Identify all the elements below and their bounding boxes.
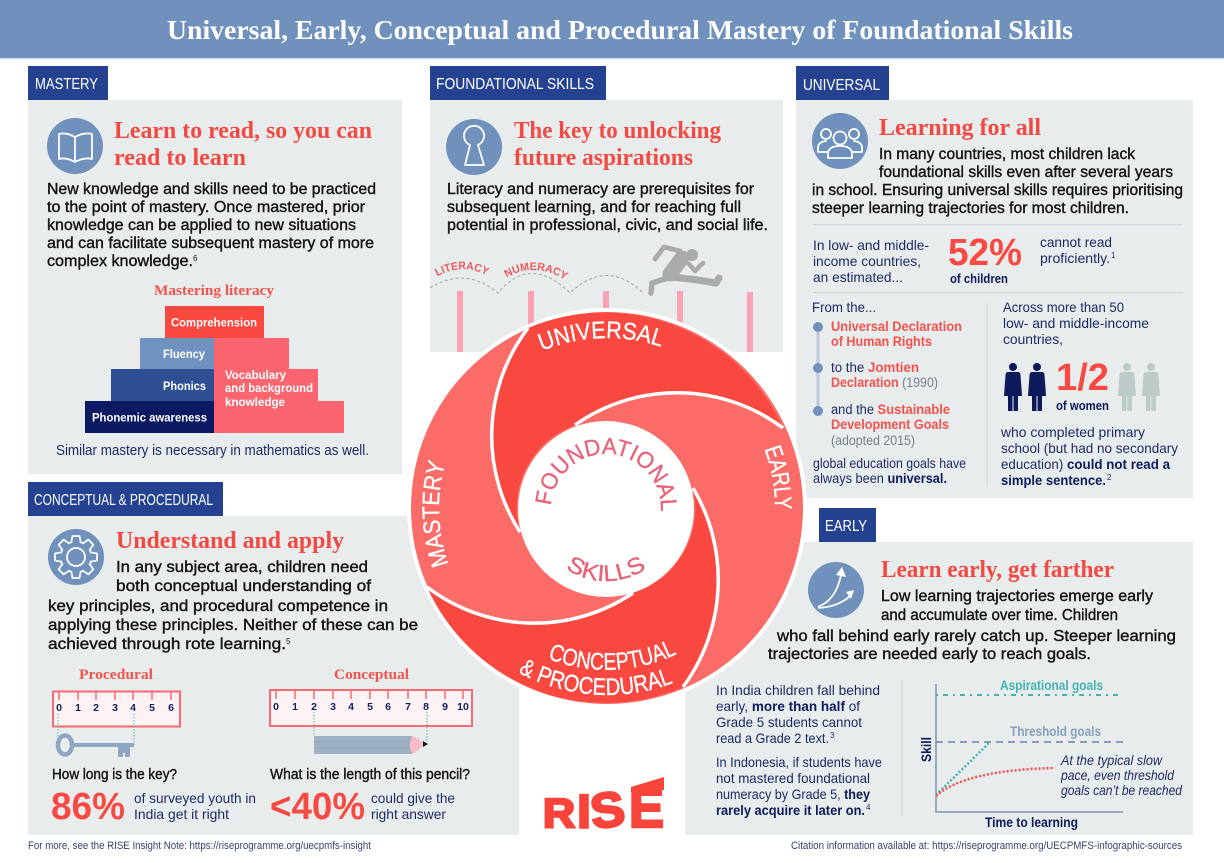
conceptual: pencil on ruler: Conceptual bbox=[334, 667, 409, 683]
icon: pencil bbox=[314, 736, 428, 754]
tag: universal: UNIVERSAL bbox=[803, 77, 880, 94]
body text: Literacy and numeracy are prerequisites for bbox=[447, 181, 755, 198]
ruler: 6 bbox=[385, 701, 391, 713]
panel: mastery bbox=[28, 66, 402, 474]
body text: potential in professional, civic, and social life. bbox=[447, 217, 768, 234]
evidence text: 4 bbox=[866, 803, 871, 812]
body text: foundational skills even after several years bbox=[879, 164, 1173, 181]
icon: keyhole bbox=[446, 119, 502, 175]
evidence text: numeracy by Grade 5, they bbox=[716, 786, 870, 802]
pyramid chart: mastering literacy: and background bbox=[225, 381, 313, 395]
stat: 1/2 of women: countries, bbox=[1003, 331, 1063, 347]
icon: gear bbox=[48, 529, 104, 585]
body text: applying these principles. Neither of these can be bbox=[48, 617, 418, 634]
timeline: global education goals: Declaration (1990) bbox=[831, 375, 938, 390]
evidence text: Grade 5 students cannot bbox=[716, 714, 862, 730]
body text: and accumulate over time. Children bbox=[881, 607, 1118, 624]
stat: 52% of children: an estimated... bbox=[813, 269, 903, 285]
hurdles illustration: LITERACY bbox=[434, 262, 490, 276]
pyramid chart: mastering literacy: Fluency bbox=[163, 347, 205, 361]
body text: knowledge can be applied to new situations bbox=[47, 217, 356, 234]
stat: 1/2 of women: school (but had no secondary bbox=[1001, 440, 1178, 456]
body text: steeper learning trajectories for most children. bbox=[812, 200, 1129, 217]
chart: learning trajectories: Threshold goals bbox=[1010, 723, 1101, 739]
heading: Understand and apply bbox=[116, 527, 345, 554]
body text: Low learning trajectories emerge early bbox=[881, 588, 1153, 605]
stat: 52% of children: proficiently. bbox=[1040, 250, 1110, 266]
heading bbox=[114, 117, 372, 171]
stat: 52% of children bbox=[813, 232, 1116, 286]
timeline: global education goals: Development Goals bbox=[831, 417, 949, 432]
stat: 1/2 of women: simple sentence. bbox=[1001, 472, 1106, 488]
timeline: global education goals: From the... bbox=[812, 299, 876, 315]
body text: in school. Ensuring universal skills requires prioritising bbox=[812, 182, 1183, 199]
logo: RISE bbox=[543, 776, 664, 840]
stat: 1/2 of women: of women bbox=[1056, 399, 1109, 413]
ruler: 2 bbox=[311, 701, 317, 713]
evidence text bbox=[716, 682, 882, 818]
panel: early bbox=[685, 508, 1193, 835]
stat: 86%: India get it right bbox=[134, 806, 229, 822]
icon: key bbox=[58, 736, 134, 757]
heading: Learn to read, so you can bbox=[114, 117, 372, 144]
body text bbox=[768, 588, 1176, 663]
logo: RISE: R bbox=[543, 790, 575, 836]
panel: universal bbox=[796, 66, 1193, 498]
heading: future aspirations bbox=[514, 144, 693, 171]
body text bbox=[812, 146, 1183, 217]
pyramid chart: mastering literacy: Comprehension bbox=[171, 316, 257, 330]
body text: both conceptual understanding of bbox=[116, 578, 372, 595]
hurdles illustration bbox=[430, 244, 753, 352]
tag: early: EARLY bbox=[825, 518, 867, 535]
pyramid chart: mastering literacy: Mastering literacy bbox=[154, 283, 275, 299]
body text: subsequent learning, and for reaching full bbox=[447, 199, 741, 216]
chart: learning trajectories: Time to learning bbox=[985, 815, 1078, 830]
timeline: global education goals: (adopted 2015) bbox=[831, 433, 915, 448]
timeline: global education goals: global education goals have bbox=[813, 455, 966, 471]
panel: foundational skills bbox=[430, 66, 783, 352]
body text: key principles, and procedural competence in bbox=[48, 598, 388, 615]
ruler: 0 bbox=[56, 702, 62, 714]
stat: 86%: of surveyed youth in bbox=[134, 790, 256, 806]
tag: foundational skills: FOUNDATIONAL SKILLS bbox=[436, 76, 594, 93]
evidence text: early, more than half of bbox=[716, 698, 860, 714]
blade: conceptual and procedural bbox=[427, 488, 718, 703]
stat: 1/2 of women: 1/2 bbox=[1056, 357, 1109, 399]
icon: women grey bbox=[1118, 363, 1160, 411]
procedural: key on ruler bbox=[51, 667, 256, 828]
logo: RISE: E bbox=[629, 776, 664, 839]
pyramid chart: mastering literacy: Phonics bbox=[163, 379, 206, 393]
body text: In any subject area, children need bbox=[116, 559, 368, 576]
swirl diagram bbox=[407, 308, 807, 704]
ruler: 10 bbox=[457, 701, 469, 713]
ruler: 5 bbox=[149, 702, 155, 714]
title banner bbox=[0, 0, 1224, 60]
body text: achieved through rote learning. bbox=[48, 636, 286, 653]
heading bbox=[514, 117, 722, 171]
ruler: 5 bbox=[367, 701, 373, 713]
footer: insight note: For more, see the RISE Insight Note: https://riseprogramme.org/uecpmfs-insight bbox=[28, 840, 371, 852]
body text: In many countries, most children lack bbox=[879, 146, 1136, 163]
label: foundational: FOUNDATIONAL bbox=[535, 438, 677, 512]
label: skills: SKILLS bbox=[568, 557, 644, 582]
label: early: EARLY bbox=[764, 445, 792, 509]
stat: 52% of children: 1 bbox=[1111, 251, 1116, 260]
body text: complex knowledge. bbox=[47, 253, 193, 270]
tag: conceptual and procedural: CONCEPTUAL & PROCEDURAL bbox=[34, 492, 213, 509]
label: mastery: MASTERY bbox=[422, 459, 448, 568]
stat: 52% of children: cannot read bbox=[1040, 234, 1112, 250]
stat: 1/2 of women: low- and middle-income bbox=[1003, 315, 1149, 331]
stat: less than 40% bbox=[270, 786, 455, 828]
ruler: 4 bbox=[348, 701, 354, 713]
icon: rising arrows bbox=[808, 562, 864, 618]
body text bbox=[447, 181, 768, 234]
pyramid chart: mastering literacy bbox=[85, 283, 344, 433]
ruler bbox=[270, 690, 472, 726]
body text: and can facilitate subsequent mastery of more bbox=[47, 235, 374, 252]
stat: 86% bbox=[51, 786, 256, 828]
logo: RISE: S bbox=[587, 782, 628, 840]
pyramid chart: mastering literacy: Phonemic awareness bbox=[92, 410, 207, 424]
stat: 52% of children: of children bbox=[950, 272, 1008, 286]
ruler: 3 bbox=[330, 701, 336, 713]
ruler: 9 bbox=[442, 701, 448, 713]
evidence text: In Indonesia, if students have bbox=[716, 754, 882, 770]
evidence text: not mastered foundational bbox=[716, 770, 870, 786]
icon: people bbox=[812, 113, 868, 169]
heading: read to learn bbox=[114, 144, 246, 171]
heading: The key to unlocking bbox=[514, 117, 722, 144]
icon: women navy bbox=[1004, 363, 1046, 411]
hurdles illustration: NUMERACY bbox=[504, 262, 568, 278]
ruler: 7 bbox=[405, 701, 411, 713]
blade: universal bbox=[492, 313, 783, 532]
ruler: 2 bbox=[93, 702, 99, 714]
timeline: global education goals: and the Sustainable bbox=[831, 402, 950, 417]
label: universal: UNIVERSAL bbox=[538, 321, 662, 350]
ruler: 1 bbox=[292, 701, 298, 713]
ruler: 6 bbox=[168, 702, 174, 714]
evidence text: In India children fall behind bbox=[716, 682, 880, 698]
stat: less than 40%: right answer bbox=[371, 806, 446, 822]
chart: learning trajectories: Aspirational goals bbox=[1000, 677, 1103, 693]
tag: mastery: MASTERY bbox=[35, 76, 98, 93]
conceptual: pencil on ruler bbox=[270, 667, 472, 828]
title: Universal, Early, Conceptual and Procedural Mastery of Foundational Skills bbox=[167, 15, 1073, 45]
timeline: global education goals: of Human Rights bbox=[831, 334, 932, 349]
chart: learning trajectories: Skill bbox=[919, 737, 934, 762]
timeline: global education goals: to the Jomtien bbox=[831, 360, 919, 375]
logo: RISE: I bbox=[578, 786, 590, 837]
chart: learning trajectories: goals can’t be reached bbox=[1061, 783, 1182, 798]
body text bbox=[48, 559, 418, 653]
body text: who fall behind early rarely catch up. Steeper learning bbox=[776, 628, 1176, 645]
timeline: global education goals: always been universal. bbox=[813, 470, 947, 486]
stat: 1/2 of women bbox=[1000, 299, 1178, 488]
stat: less than 40%: <40% bbox=[270, 786, 365, 828]
icon: hurdler bbox=[651, 247, 719, 293]
evidence text: 3 bbox=[830, 731, 835, 740]
procedural: key on ruler: How long is the key? bbox=[52, 767, 177, 783]
pyramid chart: mastering literacy: knowledge bbox=[225, 395, 285, 409]
body text: 5 bbox=[286, 637, 291, 646]
conceptual: pencil on ruler: What is the length of this pencil? bbox=[270, 767, 470, 783]
body text bbox=[47, 181, 376, 270]
timeline: global education goals: Universal Declaration bbox=[831, 319, 962, 334]
panel: conceptual and procedural bbox=[28, 482, 519, 835]
ruler: 4 bbox=[130, 702, 136, 714]
stat: 1/2 of women: Across more than 50 bbox=[1003, 299, 1124, 315]
evidence text: rarely acquire it later on. bbox=[716, 802, 865, 818]
ruler bbox=[53, 692, 180, 726]
body text: New knowledge and skills need to be practiced bbox=[47, 181, 376, 198]
heading: Learning for all bbox=[879, 114, 1041, 141]
ruler: 3 bbox=[112, 702, 118, 714]
ruler: 0 bbox=[273, 701, 279, 713]
evidence text: read a Grade 2 text. bbox=[716, 730, 829, 746]
procedural: key on ruler: Procedural bbox=[79, 667, 153, 683]
chart: learning trajectories: pace, even threshold bbox=[1060, 768, 1174, 783]
body text: to the point of mastery. Once mastered, prior bbox=[47, 199, 366, 216]
body text: trajectories are needed early to reach goals. bbox=[768, 646, 1091, 663]
stat: 1/2 of women: 2 bbox=[1107, 473, 1112, 482]
stat: 1/2 of women: education) could not read a bbox=[1001, 456, 1170, 472]
stat: 52% of children: 52% bbox=[948, 232, 1022, 274]
timeline: global education goals bbox=[812, 299, 966, 486]
body text: 6 bbox=[193, 254, 198, 263]
stat: 52% of children: In low- and middle- bbox=[813, 237, 929, 253]
label: conceptual: CONCEPTUAL bbox=[550, 642, 677, 670]
heading: Learn early, get farther bbox=[881, 556, 1114, 583]
chart: learning trajectories: At the typical slow bbox=[1060, 753, 1163, 768]
label: and procedural: & PROCEDURAL bbox=[520, 660, 673, 696]
icon: open book bbox=[47, 118, 103, 174]
ruler: 8 bbox=[423, 701, 429, 713]
note: Similar mastery is necessary in mathematics as well. bbox=[56, 442, 369, 459]
pyramid chart: mastering literacy: Vocabulary bbox=[225, 368, 286, 382]
ruler: 1 bbox=[75, 702, 81, 714]
stat: 86%: 86% bbox=[51, 786, 125, 828]
stat: less than 40%: could give the bbox=[371, 790, 455, 806]
stat: 52% of children: income countries, bbox=[813, 253, 921, 269]
stat: 1/2 of women: who completed primary bbox=[1000, 424, 1145, 440]
footer: citation: Citation information available at: https://riseprogramme.org/UECPMFS-infographic-sources bbox=[791, 840, 1182, 852]
chart: learning trajectories bbox=[919, 677, 1182, 830]
